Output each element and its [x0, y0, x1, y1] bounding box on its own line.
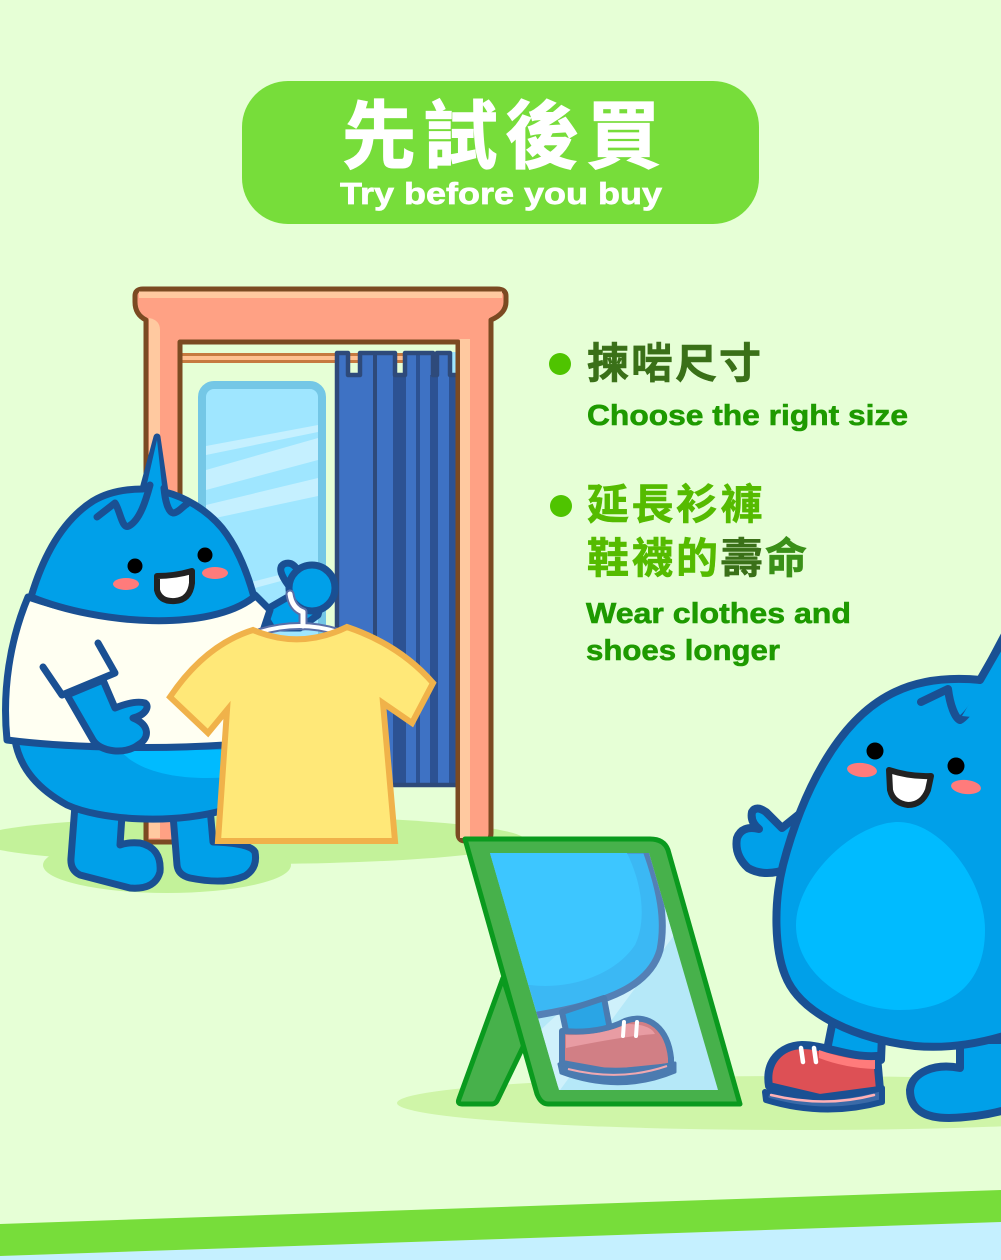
eyes: [128, 548, 212, 574]
title chinese: 先試後買: [342, 95, 668, 178]
yellow t-shirt: [170, 627, 433, 841]
title pill: [242, 81, 759, 224]
right-side leg and foot: [910, 1040, 1001, 1118]
reflected body: [480, 850, 662, 1020]
door frame: [135, 289, 506, 842]
fitting room: [135, 289, 506, 842]
sleeve: [43, 643, 115, 695]
body lower: [15, 740, 240, 819]
wear longer english: shoes longer: [586, 635, 780, 667]
heading: wear longer chinese: 延長衫褲: [587, 481, 765, 528]
room interior: mirror: [202, 385, 322, 645]
bullet two: [550, 495, 572, 517]
arm on belly: [67, 680, 147, 751]
heading: choose size chinese: 揀啱尺寸: [587, 340, 763, 387]
bullet one: [549, 353, 571, 375]
wear longer english: Wear clothes and: [586, 598, 851, 630]
frame highlights: [139, 292, 502, 838]
choose size english: Choose the right size: [587, 400, 908, 432]
waving arm: [736, 807, 808, 873]
body: [776, 625, 1001, 1047]
mouth: [157, 571, 192, 601]
title english: Try before you buy: [340, 176, 663, 211]
mouth: [889, 770, 931, 805]
legs: [71, 805, 256, 888]
character right: [736, 625, 1001, 1118]
mirror glass and reflection: [490, 853, 718, 1090]
mirror stand leg: [458, 978, 524, 1104]
wear longer english: [586, 598, 851, 667]
curtain rod: [182, 353, 456, 363]
bottom band: [0, 1190, 1001, 1260]
mirror frame: [465, 839, 740, 1104]
heading: wear longer chinese: [587, 481, 810, 582]
head: [31, 437, 254, 621]
curtain: [337, 352, 456, 785]
reflected shoe: [562, 1019, 671, 1072]
character left: [6, 437, 433, 888]
shirt: [6, 595, 270, 747]
cheeks: [846, 761, 982, 796]
belly: [796, 822, 985, 1010]
ground shadow right: [397, 1076, 1001, 1130]
heading: wear longer chinese: 鞋襪的壽命: [587, 535, 810, 582]
hair: [921, 658, 1001, 720]
leg: [827, 1020, 882, 1060]
ground shadow left: [0, 816, 525, 893]
mirror on stand: [458, 839, 740, 1104]
hair: [97, 485, 187, 527]
right arm and hand: [262, 563, 335, 628]
red shoe: [765, 1045, 882, 1110]
reflected leg: [559, 995, 612, 1029]
hanger: [260, 594, 338, 632]
cheeks: [113, 567, 228, 590]
eyes: [866, 742, 964, 774]
